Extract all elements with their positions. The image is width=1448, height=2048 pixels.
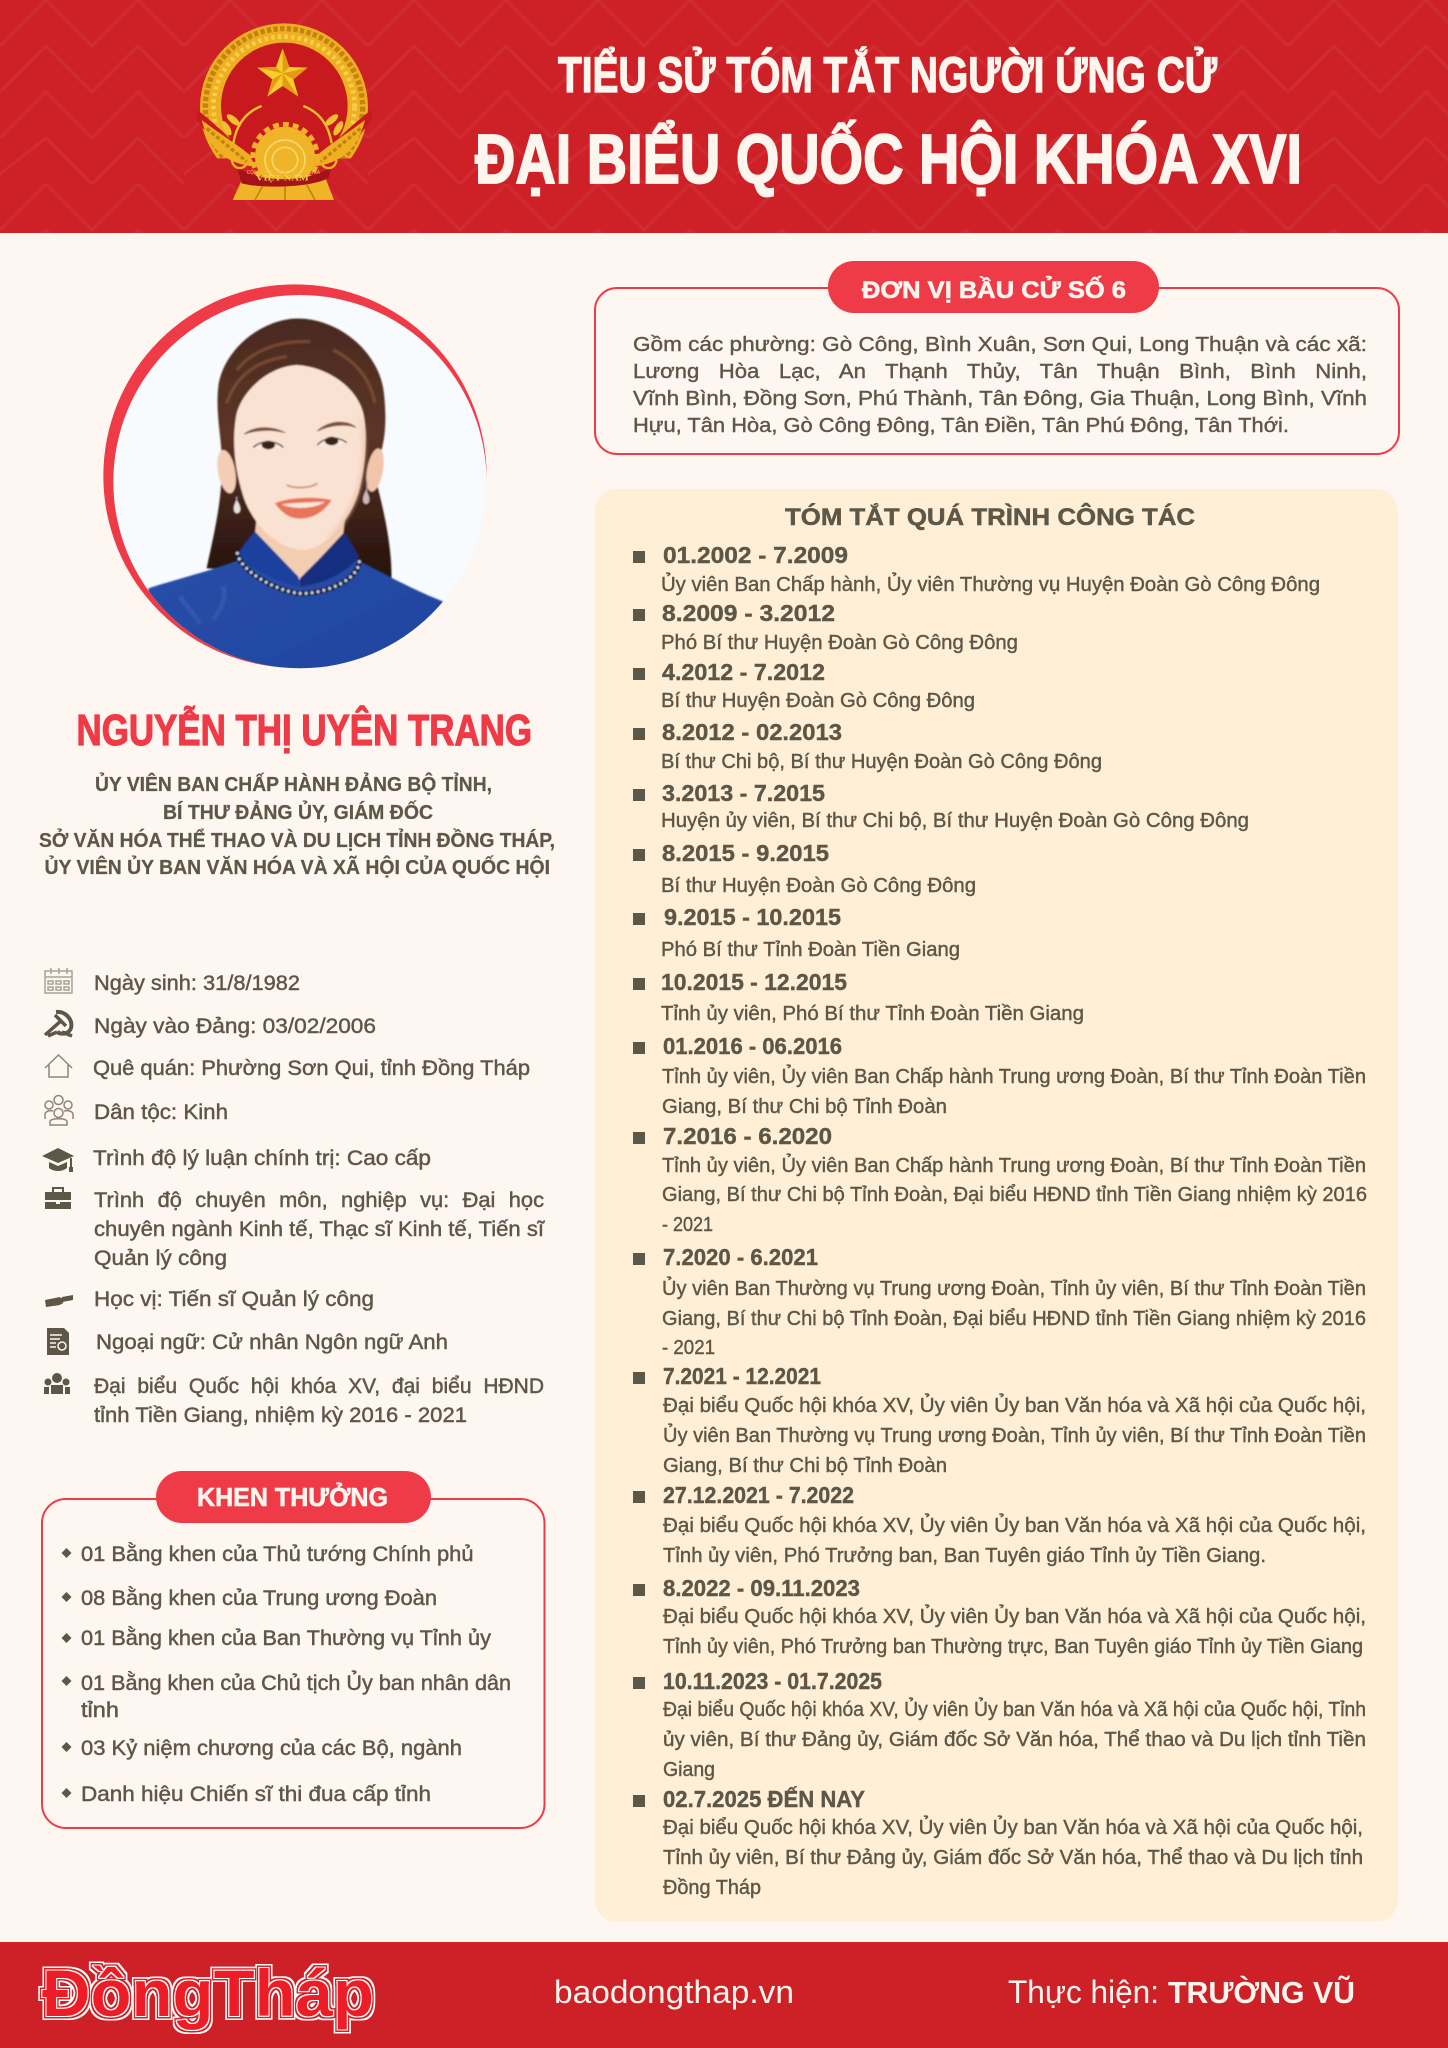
text: political theory level: Trình độ lý luận chính trị: Cao cấp — [93, 1147, 431, 1170]
entry 10.2015: Tỉnh ủy viên, Phó Bí thư Tỉnh Đoàn Tiền Giang — [661, 1003, 1084, 1025]
entry 7.2016: Giang, Bí thư Chi bộ Tỉnh Đoàn, Đại biểu HĐND tỉnh Tiền Giang nhiệm kỳ 2016 — [662, 1184, 1367, 1206]
icon: graduation cap — [42, 1148, 74, 1172]
entry 7.2020: - 2021 — [662, 1337, 715, 1359]
heading pill: electoral unit — [828, 261, 1159, 313]
entry 10.11.2023: Đại biểu Quốc hội khóa XV, Ủy viên Ủy ban Văn hóa và Xã hội của Quốc hội, Tỉnh — [663, 1697, 1366, 1721]
credit: TRƯỜNG VŨ — [1168, 1974, 1355, 2010]
award items: 08 Bằng khen của Trung ương Đoàn — [81, 1587, 437, 1610]
entry 7.2020: Giang, Bí thư Chi bộ Tỉnh Đoàn, Đại biểu HĐND tỉnh Tiền Giang nhiệm kỳ 2016 — [662, 1308, 1366, 1330]
heading: work history: TÓM TẮT QUÁ TRÌNH CÔNG TÁC — [785, 503, 1195, 531]
footer — [0, 1942, 1448, 2048]
entry 10.11.2023: ủy viên, Bí thư Đảng ủy, Giám đốc Sở Văn hóa, Thể thao và Du lịch tỉnh Tiền — [663, 1729, 1366, 1751]
entry 7.2020: Ủy viên Ban Thường vụ Trung ương Đoàn, Tỉnh ủy viên, Bí thư Tỉnh Đoàn Tiền — [662, 1276, 1366, 1300]
credit: Thực hiện: — [1008, 1974, 1159, 2010]
icon: national emblem of Vietnam — [197, 23, 372, 200]
entry 01.2002: Ủy viên Ban Chấp hành, Ủy viên Thường vụ Huyện Đoàn Gò Công Đông — [661, 572, 1320, 596]
entry 02.7.2025: Đại biểu Quốc hội khóa XV, Ủy viên Ủy ban Văn hóa và Xã hội của Quốc hội, — [663, 1815, 1363, 1839]
entry 7.2016: - 2021 — [662, 1214, 713, 1236]
candidate positions: ỦY VIÊN BAN CHẤP HÀNH ĐẢNG BỘ TỈNH, — [95, 772, 492, 796]
entry 7.2021: Đại biểu Quốc hội khóa XV, Ủy viên Ủy ban Văn hóa và Xã hội của Quốc hội, — [663, 1393, 1366, 1417]
text: date of birth: Ngày sinh: 31/8/1982 — [94, 972, 300, 995]
text: academic degree: Học vị: Tiến sĩ Quản lý công — [94, 1288, 374, 1311]
text: party entry date: Ngày vào Đảng: 03/02/2006 — [94, 1015, 376, 1038]
entry 10.11.2023 — [633, 1668, 1366, 1781]
award items: 01 Bằng khen của Thủ tướng Chính phủ — [81, 1543, 473, 1566]
entry 02.7.2025: 02.7.2025 ĐẾN NAY — [663, 1785, 865, 1812]
entry 7.2016 — [633, 1123, 1367, 1236]
entry 01.2016 — [633, 1033, 1366, 1118]
entry 7.2020 — [633, 1244, 1366, 1359]
entry 8.2009 — [633, 600, 1018, 654]
panel: awards — [42, 1471, 544, 1828]
entry 7.2021: Ủy viên Ban Thường vụ Trung ương Đoàn, Tỉnh ủy viên, Bí thư Tỉnh Đoàn Tiền — [663, 1423, 1366, 1447]
personal information list — [42, 968, 545, 1427]
entry 8.2022: Đại biểu Quốc hội khóa XV, Ủy viên Ủy ban Văn hóa và Xã hội của Quốc hội, — [663, 1604, 1366, 1628]
logo: Đồng Tháp: ĐồngTháp — [42, 1956, 374, 2030]
award items: 03 Kỷ niệm chương của các Bộ, ngành — [81, 1737, 462, 1760]
entry 4.2012: Bí thư Huyện Đoàn Gò Công Đông — [661, 690, 975, 712]
entry 01.2016: 01.2016 - 06.2016 — [663, 1033, 842, 1059]
heading pill: awards — [156, 1471, 431, 1523]
text: hometown: Quê quán: Phường Sơn Qui, tỉnh Đồng Tháp — [93, 1057, 530, 1080]
icon: calendar — [45, 968, 72, 993]
entry 10.2015: 10.2015 - 12.2015 — [661, 969, 847, 995]
text: previous deputy roles: tỉnh Tiền Giang, nhiệm kỳ 2016 - 2021 — [94, 1404, 467, 1427]
website: baodongthap.vn — [554, 1974, 794, 2010]
entry 8.2022 — [633, 1575, 1366, 1658]
text: professional qualification: Quản lý công — [94, 1247, 227, 1270]
text: professional qualification: Trình độ chuyên môn, nghiệp vụ: Đại học — [94, 1189, 544, 1212]
credit — [1008, 1974, 1355, 2010]
entry 4.2012: 4.2012 - 7.2012 — [662, 659, 825, 685]
entry 10.11.2023: Giang — [663, 1759, 715, 1781]
entry 9.2015: 9.2015 - 10.2015 — [664, 904, 841, 930]
entry 8.2015: Bí thư Huyện Đoàn Gò Công Đông — [661, 875, 976, 897]
entry 3.2013: Huyện ủy viên, Bí thư Chi bộ, Bí thư Huyện Đoàn Gò Công Đông — [661, 810, 1249, 832]
text: previous deputy roles — [94, 1375, 544, 1427]
award items: Danh hiệu Chiến sĩ thi đua cấp tỉnh — [81, 1783, 431, 1806]
award items: 01 Bằng khen của Chủ tịch Ủy ban nhân dân — [81, 1671, 511, 1695]
text: ethnicity: Dân tộc: Kinh — [94, 1101, 228, 1124]
icon: briefcase — [45, 1187, 71, 1209]
entry 8.2015: 8.2015 - 9.2015 — [662, 840, 829, 866]
entry 27.12.2021: Đại biểu Quốc hội khóa XV, Ủy viên Ủy ban Văn hóa và Xã hội của Quốc hội, — [663, 1513, 1366, 1537]
electoral unit description: Vĩnh Bình, Đồng Sơn, Phú Thành, Tân Đông, Gia Thuận, Long Bình, Vĩnh — [633, 388, 1367, 410]
icon: certificate document — [47, 1328, 69, 1355]
electoral unit description: Hựu, Tân Hòa, Gò Công Đông, Tân Điền, Tân Phú Đông, Tân Thới. — [633, 415, 1289, 437]
entry 01.2016: Giang, Bí thư Chi bộ Tỉnh Đoàn — [662, 1096, 947, 1118]
entry 10.11.2023: 10.11.2023 - 01.7.2025 — [663, 1668, 882, 1694]
entry 27.12.2021: Tỉnh ủy viên, Phó Trưởng ban, Ban Tuyên giáo Tỉnh ủy Tiền Giang. — [663, 1545, 1266, 1567]
portrait photo — [103, 284, 487, 703]
electoral unit description — [633, 334, 1367, 437]
candidate positions: SỞ VĂN HÓA THỂ THAO VÀ DU LỊCH TỈNH ĐỒNG THÁP, — [39, 828, 555, 852]
panel: work history — [595, 489, 1398, 1922]
icon: national emblem of Vietnam: CỘNG HÒA XÃ HỘI CHỦ NGHĨA — [247, 169, 320, 176]
award items: 01 Bằng khen của Ban Thường vụ Tỉnh ủy — [81, 1627, 492, 1650]
text: foreign language: Ngoại ngữ: Cử nhân Ngôn ngữ Anh — [96, 1331, 448, 1354]
entry 7.2020: 7.2020 - 6.2021 — [663, 1244, 818, 1270]
candidate positions: BÍ THƯ ĐẢNG ỦY, GIÁM ĐỐC — [163, 800, 433, 824]
entry 02.7.2025: Tỉnh ủy viên, Bí thư Đảng ủy, Giám đốc Sở Văn hóa, Thể thao và Du lịch tỉnh — [663, 1847, 1363, 1869]
entry 4.2012 — [633, 659, 975, 712]
entry 9.2015: Phó Bí thư Tỉnh Đoàn Tiền Giang — [661, 939, 960, 961]
award items: tỉnh — [81, 1699, 119, 1722]
icon: national emblem of Vietnam: VIỆT NAM — [256, 173, 309, 183]
entry 8.2022: 8.2022 - 09.11.2023 — [663, 1575, 860, 1601]
entry 9.2015 — [633, 904, 960, 961]
entry 8.2012 — [633, 719, 1102, 773]
icon: people outline — [45, 1096, 73, 1125]
entry 7.2021: Giang, Bí thư Chi bộ Tỉnh Đoàn — [663, 1455, 947, 1477]
icon: house — [45, 1055, 72, 1077]
candidate positions — [39, 772, 555, 879]
title — [475, 46, 1302, 198]
header banner — [0, 0, 1448, 233]
electoral unit description: Lương Hòa Lạc, An Thạnh Thủy, Tân Thuận Bình, Bình Ninh, — [633, 361, 1367, 383]
entry 3.2013 — [633, 780, 1249, 832]
icon: people solid — [44, 1373, 70, 1394]
entry 01.2002 — [633, 542, 1320, 596]
entry 27.12.2021 — [633, 1482, 1366, 1567]
text: professional qualification: chuyên ngành Kinh tế, Thạc sĩ Kinh tế, Tiến sĩ — [94, 1218, 545, 1241]
entry 8.2012: Bí thư Chi bộ, Bí thư Huyện Đoàn Gò Công Đông — [661, 751, 1102, 773]
entry 8.2009: Phó Bí thư Huyện Đoàn Gò Công Đông — [661, 632, 1018, 654]
entry 02.7.2025 — [633, 1785, 1363, 1899]
title: TIỂU SỬ TÓM TẮT NGƯỜI ỨNG CỬ — [558, 46, 1217, 103]
candidate positions: ỦY VIÊN ỦY BAN VĂN HÓA VÀ XÃ HỘI CỦA QUỐC HỘI — [44, 855, 550, 879]
heading pill: awards: KHEN THƯỞNG — [197, 1481, 388, 1512]
entry 7.2016: Tỉnh ủy viên, Ủy viên Ban Chấp hành Trung ương Đoàn, Bí thư Tỉnh Đoàn Tiền — [662, 1153, 1366, 1177]
award bullets — [62, 1548, 72, 1798]
text: previous deputy roles: Đại biểu Quốc hội khóa XV, đại biểu HĐND — [94, 1375, 544, 1398]
entry 01.2002: 01.2002 - 7.2009 — [663, 542, 848, 568]
electoral unit description: Gồm các phường: Gò Công, Bình Xuân, Sơn Qui, Long Thuận và các xã: — [633, 334, 1367, 356]
text: professional qualification — [94, 1189, 545, 1270]
entry 02.7.2025: Đồng Tháp — [663, 1877, 761, 1899]
entry 7.2016: 7.2016 - 6.2020 — [663, 1123, 832, 1149]
entry 8.2009: 8.2009 - 3.2012 — [662, 600, 835, 626]
entry 8.2015 — [633, 840, 976, 897]
icon: hammer and sickle — [45, 1012, 72, 1036]
entry 7.2021: 7.2021 - 12.2021 — [663, 1363, 821, 1389]
panel: electoral unit — [595, 261, 1399, 454]
entry 27.12.2021: 27.12.2021 - 7.2022 — [663, 1482, 854, 1508]
entry 10.2015 — [633, 969, 1084, 1025]
entry 8.2022: Tỉnh ủy viên, Phó Trưởng ban Thường trực, Ban Tuyên giáo Tỉnh ủy Tiền Giang — [663, 1636, 1363, 1658]
candidate name: NGUYỄN THỊ UYÊN TRANG — [76, 705, 532, 755]
entry 8.2012: 8.2012 - 02.2013 — [662, 719, 842, 745]
entry 01.2016: Tỉnh ủy viên, Ủy viên Ban Chấp hành Trung ương Đoàn, Bí thư Tỉnh Đoàn Tiền — [662, 1064, 1366, 1088]
heading pill: electoral unit: ĐƠN VỊ BẦU CỬ SỐ 6 — [862, 275, 1126, 304]
entry 7.2021 — [633, 1363, 1366, 1477]
award items — [81, 1543, 511, 1806]
entry 3.2013: 3.2013 - 7.2015 — [662, 780, 825, 806]
icon: diploma scroll — [45, 1295, 73, 1307]
